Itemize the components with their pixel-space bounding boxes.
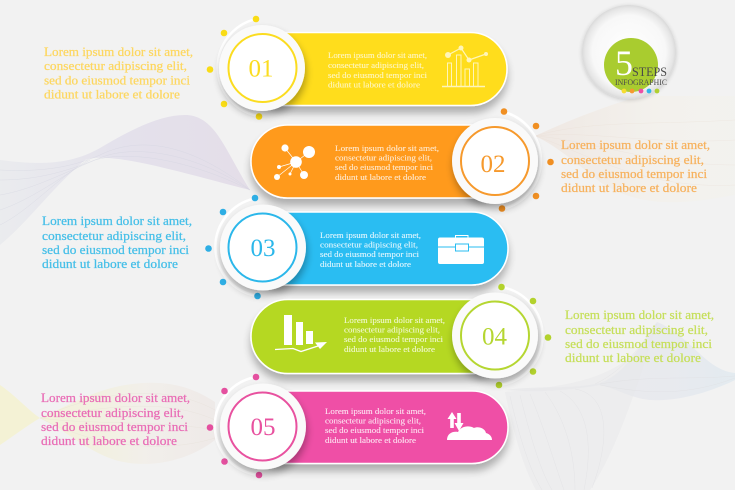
number badge <box>452 118 538 204</box>
bar text: consectetur adipiscing elit, <box>344 324 440 334</box>
step 3 description: consectetur adipiscing elit, <box>42 228 186 243</box>
step 5 description: consectetur adipiscing elit, <box>41 405 184 420</box>
bar text <box>344 315 445 354</box>
green bar <box>251 300 508 374</box>
bar text: didunt ut labore et dolore <box>320 259 411 269</box>
bar text <box>320 230 421 269</box>
step 2 description: consectetur adipiscing elit, <box>561 152 704 167</box>
title badge: 5 steps infographic <box>582 5 676 99</box>
bar text: sed do eiusmod tempor inci <box>344 334 444 344</box>
orange bar <box>251 125 508 198</box>
step 2 description: didunt ut labore et dolore <box>561 180 697 195</box>
icon: molecule <box>274 144 315 180</box>
number badge <box>219 25 305 111</box>
step 1 panel <box>207 16 507 120</box>
yellow bar <box>250 32 507 106</box>
step 3 description: sed do eiusmod tempor inci <box>42 242 189 257</box>
number badge <box>220 204 306 290</box>
steps label: STEPS <box>632 64 667 79</box>
step 1 description: consectetur adipiscing elit, <box>44 58 187 73</box>
icon: falling bars with arrow <box>275 315 327 352</box>
number badge: 04 <box>482 324 508 350</box>
number badge: 03 <box>250 235 276 262</box>
number badge <box>452 292 538 378</box>
icon: briefcase <box>438 236 484 264</box>
bar text: consectetur adipiscing elit, <box>325 416 421 426</box>
bar text: didunt ut labore et dolore <box>328 80 420 90</box>
step 1 description <box>44 44 193 102</box>
bar text: sed do eiusmod tempor inci <box>320 249 420 259</box>
arc with dots <box>207 374 262 478</box>
step 5 description: didunt ut labore et dolore <box>41 433 177 448</box>
arc with dots <box>496 284 551 388</box>
bar text: consectetur adipiscing elit, <box>328 60 424 70</box>
number badge: 05 <box>250 414 276 441</box>
bar text: Lorem ipsum dolor sit amet, <box>344 315 445 325</box>
bar text: Lorem ipsum dolor sit amet, <box>328 50 427 60</box>
step 2 description: Lorem ipsum dolor sit amet, <box>561 137 710 152</box>
icon: arrows and cloud <box>447 412 492 440</box>
bar text: Lorem ipsum dolor sit amet, <box>320 230 421 240</box>
number badge: 02 <box>480 151 506 178</box>
icon: line and bar chart <box>442 46 488 86</box>
bar text: sed do eiusmod tempor inci <box>325 425 425 435</box>
step 1 description: Lorem ipsum dolor sit amet, <box>44 44 193 59</box>
arc with dots <box>499 108 554 212</box>
number badge: 01 <box>248 56 274 82</box>
bar text: didunt ut labore et dolore <box>325 435 416 445</box>
step 4 description <box>565 307 714 365</box>
step 3 description: Lorem ipsum dolor sit amet, <box>42 213 192 228</box>
step 2 description: sed do eiusmod tempor inci <box>561 166 707 181</box>
blue bar <box>250 212 508 285</box>
step 2 panel <box>251 108 554 212</box>
numeral 5: 5 <box>615 43 633 83</box>
step 4 description: sed do eiusmod tempor inci <box>565 336 712 351</box>
bar text: consectetur adipiscing elit, <box>320 240 418 250</box>
bar text: sed do eiusmod tempor inci <box>328 70 428 80</box>
bar text <box>325 406 426 445</box>
number badge <box>220 384 306 470</box>
colour dots <box>622 89 659 93</box>
bar text <box>328 50 428 90</box>
bar text: consectetur adipiscing elit, <box>335 152 432 162</box>
step 2 description <box>561 137 710 195</box>
green disc <box>604 38 658 92</box>
step 3 description: didunt ut labore et dolore <box>42 256 178 271</box>
bar text: sed do eiusmod tempor inci <box>335 162 434 172</box>
step 4 description: didunt ut labore et dolore <box>565 350 701 365</box>
bar text: didunt ut labore et dolore <box>335 172 426 182</box>
step 5 description: Lorem ipsum dolor sit amet, <box>41 390 190 405</box>
step 3 description <box>42 213 192 271</box>
step 4 description: consectetur adipiscing elit, <box>565 322 708 337</box>
bar text <box>335 143 439 182</box>
arc with dots <box>205 195 261 299</box>
step 1 description: didunt ut labore et dolore <box>44 86 180 102</box>
step 5 description <box>41 390 190 448</box>
bar text: Lorem ipsum dolor sit amet, <box>325 406 426 416</box>
bar text: didunt ut labore et dolore <box>344 344 435 354</box>
pink bar <box>250 391 508 464</box>
step 5 panel <box>207 374 508 478</box>
step 4 panel <box>251 284 551 388</box>
step 3 panel <box>205 195 508 299</box>
step 4 description: Lorem ipsum dolor sit amet, <box>565 307 714 322</box>
step 1 description: sed do eiusmod tempor inci <box>44 72 190 88</box>
infographic label: INFOGRAPHIC <box>615 77 667 87</box>
bar text: Lorem ipsum dolor sit amet, <box>335 143 439 153</box>
step 5 description: sed do eiusmod tempor inci <box>41 419 188 434</box>
arc with dots <box>207 16 262 120</box>
